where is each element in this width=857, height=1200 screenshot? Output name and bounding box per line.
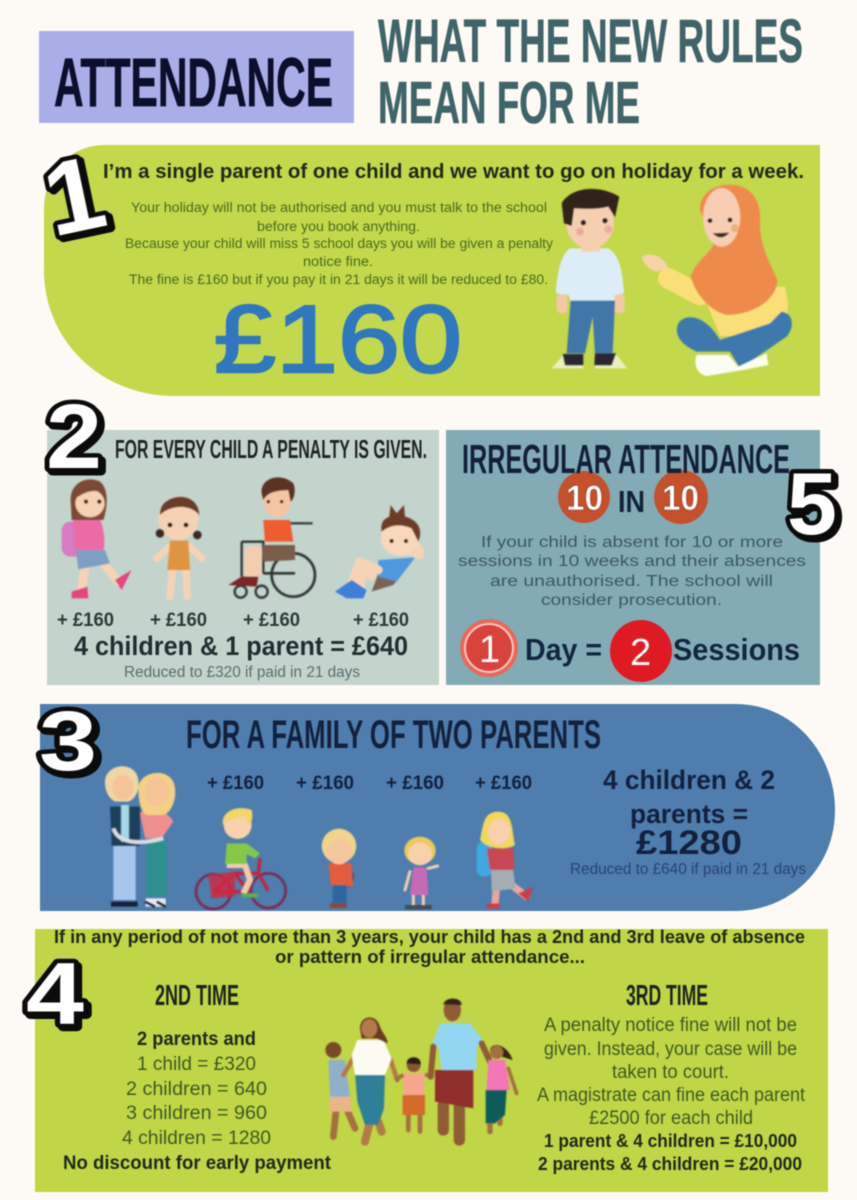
per-child fines: + £160	[207, 773, 264, 794]
child in orange	[156, 497, 202, 597]
number 1: 1	[34, 134, 115, 259]
illustration: boy and woman talking	[552, 185, 792, 376]
panel 4: second and third time	[26, 927, 828, 1192]
one day equals two sessions: 2	[630, 632, 651, 674]
panel 5 explanation: are unauthorised. The school will	[490, 573, 773, 590]
10 in 10 badges: IN	[618, 484, 645, 519]
panel 3 heading: FOR A FAMILY OF TWO PARENTS	[186, 713, 601, 757]
father	[431, 999, 490, 1140]
second time column: 4 children = 1280	[122, 1128, 271, 1149]
third time column: given. Instead, your case will be	[544, 1039, 797, 1060]
per-child fines	[207, 773, 532, 794]
one day equals two sessions: Sessions	[673, 632, 800, 667]
panel 2: a penalty for every child	[46, 386, 439, 685]
10 in 10 badges	[558, 470, 708, 524]
panel 1 explanation: notice fine.	[303, 254, 373, 269]
panel 3: family of two parents	[39, 694, 835, 911]
mother	[343, 1017, 397, 1142]
second time column: 3 children = 960	[126, 1103, 267, 1124]
per-child fines: + £160	[57, 610, 114, 631]
illustration: family holding hands	[325, 999, 517, 1142]
third time column: 1 parent & 4 children = £10,000	[544, 1130, 797, 1151]
third time column: 2 parents & 4 children = £20,000	[538, 1153, 802, 1174]
child in wheelchair	[228, 477, 315, 598]
per-child fines: + £160	[475, 773, 532, 794]
panel 1 explanation: The fine is £160 but if you pay it in 21 days it will be reduced to £80.	[129, 272, 548, 287]
title block: attendance: ATTENDANCE	[54, 44, 333, 121]
second time column: 2 parents and	[137, 1029, 256, 1050]
panel 2 total: 4 children & 1 parent = £640	[74, 631, 408, 661]
panel 1: single parent of one child	[34, 134, 820, 396]
number 3: 3	[39, 694, 97, 788]
third time column	[537, 980, 806, 1174]
panel 4 heading	[54, 927, 805, 967]
panel 4 heading: If in any period of not more than 3 years, your child has a 2nd and 3rd leave of absence	[54, 927, 805, 947]
small girl waving	[404, 837, 438, 909]
panel 5: irregular attendance	[446, 430, 837, 685]
panel 3 total	[603, 765, 775, 862]
middle child	[395, 1057, 432, 1132]
10 in 10 badges: 10	[662, 479, 699, 518]
two parents	[105, 766, 175, 907]
number 2: 2	[46, 386, 102, 488]
right girl	[486, 1045, 517, 1132]
girl walking with backpack	[477, 812, 533, 908]
third time column: A magistrate can fine each parent	[537, 1085, 806, 1106]
10 in 10 badges: 10	[566, 479, 603, 518]
panel 1 explanation	[125, 200, 553, 287]
one day equals two sessions: Day =	[525, 632, 602, 667]
girl with backpack	[62, 479, 132, 598]
panel 3 total: £1280	[636, 824, 742, 862]
panel 3 total: parents =	[630, 799, 748, 829]
left child	[325, 1042, 355, 1137]
boy with backpack	[322, 829, 356, 908]
third time column: A penalty notice fine will not be	[544, 1015, 797, 1036]
per-child fines: + £160	[353, 610, 409, 631]
panel 1 explanation: Because your child will miss 5 school days you will be given a penalty	[125, 236, 553, 251]
panel 2 heading: FOR EVERY CHILD A PENALTY IS GIVEN.	[115, 434, 427, 464]
panel 4 heading: or pattern of irregular attendance...	[275, 947, 585, 967]
second time column: 2ND TIME	[155, 980, 239, 1012]
panel 3 total: 4 children & 2	[603, 765, 775, 795]
title: what the new rules mean for me	[378, 7, 803, 136]
panel 5 explanation: sessions in 10 weeks and their absences	[458, 553, 806, 570]
title block: attendance	[39, 31, 354, 123]
panel 5 explanation: consider prosecution.	[541, 592, 722, 609]
second time column: 1 child = £320	[137, 1054, 256, 1075]
per-child fines: + £160	[296, 773, 354, 794]
boy doing sit-up	[335, 505, 424, 598]
per-child fines	[57, 610, 409, 631]
second time column	[63, 980, 332, 1174]
boy on bicycle	[196, 808, 286, 909]
panel 1 heading: I’m a single parent of one child and we want to go on holiday for a week.	[103, 161, 804, 183]
fine amount: £160	[214, 286, 462, 393]
panel 5 explanation: If your child is absent for 10 or more	[481, 534, 783, 551]
per-child fines: + £160	[150, 610, 207, 631]
second time column: No discount for early payment	[63, 1153, 332, 1174]
panel 3 reduction note: Reduced to £640 if paid in 21 days	[570, 861, 806, 878]
panel 1 explanation: Your holiday will not be authorised and you must talk to the school	[131, 200, 547, 215]
per-child fines: + £160	[243, 610, 300, 631]
one day equals two sessions: 1	[479, 629, 500, 671]
one day equals two sessions	[460, 619, 800, 682]
panel 1 explanation: before you book anything.	[257, 219, 420, 234]
third time column: 3RD TIME	[626, 980, 708, 1012]
number 4: 4	[26, 944, 84, 1043]
third time column: taken to court.	[612, 1062, 729, 1083]
illustration: parents and four children	[105, 766, 533, 909]
panel 5 explanation	[458, 534, 806, 609]
third time column: £2500 for each child	[589, 1108, 753, 1129]
title: what the new rules mean for me: MEAN FOR ME	[378, 70, 640, 136]
per-child fines: + £160	[386, 773, 444, 794]
illustration: four children	[62, 477, 424, 598]
second time column: 2 children = 640	[126, 1079, 267, 1100]
panel 2 reduction note: Reduced to £320 if paid in 21 days	[124, 664, 360, 681]
number 5: 5	[787, 454, 837, 553]
